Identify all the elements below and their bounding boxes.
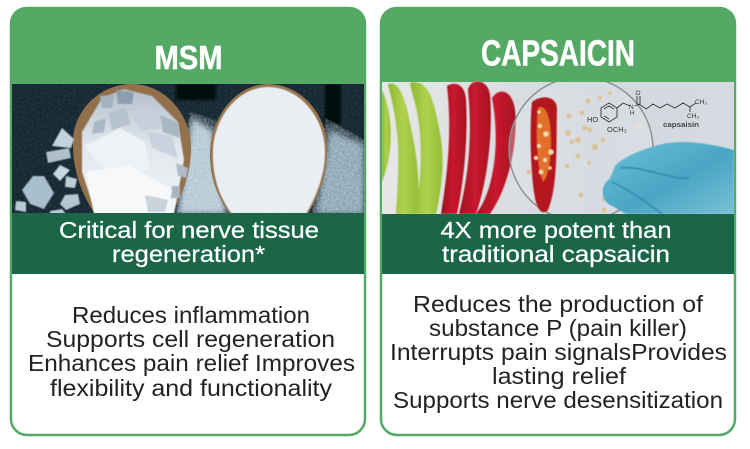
crystals <box>15 128 80 214</box>
callout text: traditional capsaicin <box>442 241 670 267</box>
benefits list: flexibility and functionality <box>50 375 332 401</box>
heading: MSM: MSM <box>154 40 222 77</box>
callout text: 4X more potent than <box>440 217 672 243</box>
callout text <box>440 217 672 267</box>
benefits list: substance P (pain killer) <box>429 315 687 341</box>
benefits list: Enhances pain relief Improves <box>28 350 355 376</box>
photo: chili peppers and petri dish: OCH₃ <box>607 125 627 134</box>
seeds <box>526 91 642 212</box>
callout text <box>59 217 319 267</box>
card background <box>11 8 365 435</box>
photo: chili peppers and petri dish <box>382 77 734 221</box>
loose salt <box>178 118 226 214</box>
photo: chili peppers and petri dish: HO <box>587 115 598 124</box>
card background <box>381 8 735 435</box>
photo: chili peppers and petri dish: CH₃ <box>687 113 699 120</box>
callout band <box>382 214 734 274</box>
benefits list <box>390 291 727 413</box>
callout band <box>12 213 364 274</box>
benefits list: Interrupts pain signalsProvides <box>390 339 727 365</box>
photo: chili peppers and petri dish: N <box>629 104 634 111</box>
benefits list: lasting relief <box>492 363 626 389</box>
panel: MSM <box>10 7 366 435</box>
benefits list: Reduces inflammation <box>72 302 310 328</box>
photo: chili peppers and petri dish: O <box>636 90 641 97</box>
flakes in spoon <box>82 89 184 214</box>
heading: CAPSAICIN: CAPSAICIN <box>481 32 635 74</box>
callout text: regeneration* <box>112 241 265 267</box>
molecule label: capsaisin <box>663 120 699 129</box>
header band <box>10 7 366 84</box>
cut pepper <box>531 97 557 212</box>
benefits list: Reduces the production of <box>413 291 703 317</box>
photo: chili peppers and petri dish: H <box>630 111 634 117</box>
panel: Capsaicin <box>380 7 736 435</box>
petri dish <box>509 77 653 221</box>
red peppers <box>441 82 516 214</box>
molecule diagram <box>601 96 696 122</box>
benefits list: Supports cell regeneration <box>46 326 335 352</box>
benefits list: Supports nerve desensitization <box>393 387 723 413</box>
photo: salt in wooden spoons <box>12 84 364 214</box>
photo: chili peppers and petri dish: CH₃ <box>695 99 707 106</box>
green peppers <box>382 82 443 214</box>
left spoon <box>73 84 191 214</box>
gloved hand <box>603 142 734 214</box>
right spoon <box>210 84 327 214</box>
benefits list <box>28 302 355 401</box>
header band <box>380 7 736 84</box>
callout text: Critical for nerve tissue <box>59 217 319 243</box>
